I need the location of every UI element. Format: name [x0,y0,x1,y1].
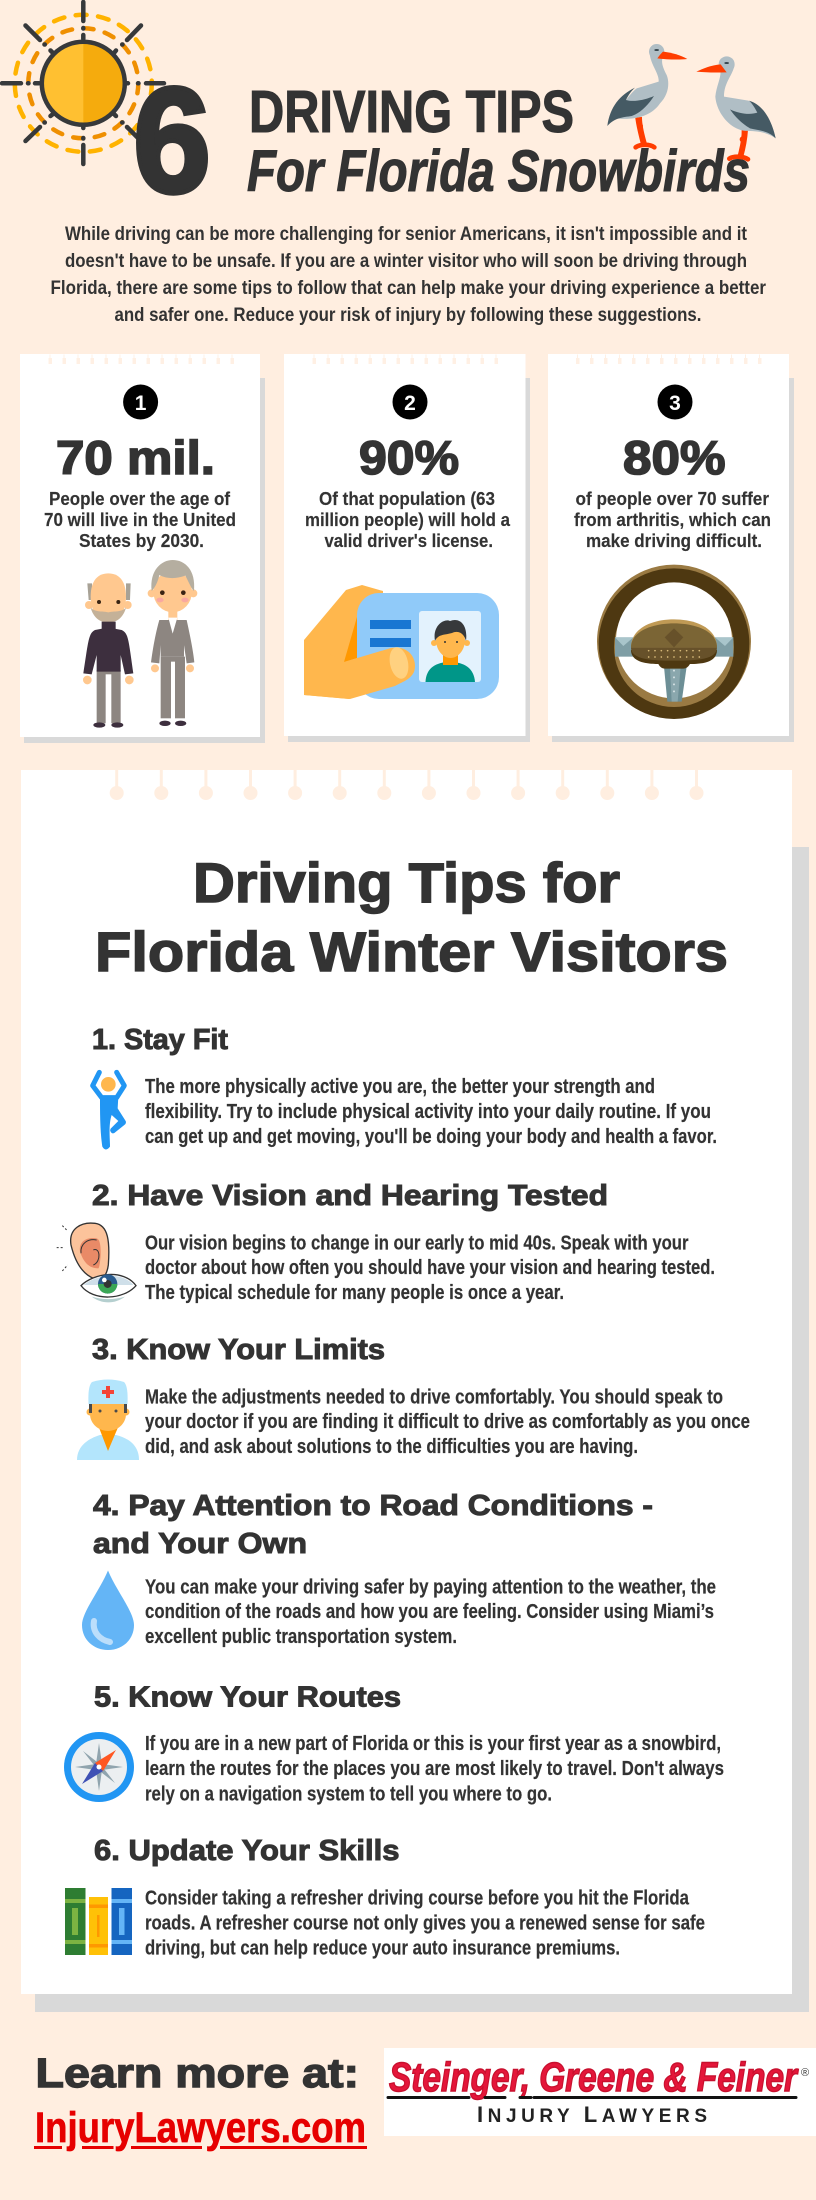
tip 2 text: Our vision begins to change in our early to mid 40s. Speak with your [145,1232,689,1254]
number badge 3 [658,384,692,420]
tip 1 heading: 1. Stay Fit [92,1024,228,1056]
tip 5 heading: 5. Know Your Routes [94,1682,401,1714]
tip 1: stay fit [92,1024,717,1149]
tip 4 heading: 4. Pay Attention to Road Conditions - [93,1490,653,1522]
icon: ear and eye [57,1223,136,1302]
footer call to action: Learn more at: [36,2050,359,2096]
tip 2 text [145,1232,715,1304]
tip 6 heading: 6. Update Your Skills [94,1835,400,1867]
logo: Steinger, Greene & Feiner [384,2048,816,2136]
number badge 1: 1 [135,392,147,415]
stat description 1 [44,488,236,551]
panel heading: Driving Tips for [193,851,620,914]
tip 5 text: learn the routes for the places you are most likely to travel. Don't always [145,1758,724,1780]
panel: stat card 1 [20,354,265,743]
title: DRIVING TIPS [249,79,574,145]
tip 6: update your skills [65,1835,705,1960]
logo: Steinger, Greene & Feiner: ® [801,2067,809,2079]
icon: water drop [82,1570,134,1650]
number badge 2 [392,384,428,420]
tip 4 text: condition of the roads and how you are feeling. Consider using Miami’s [145,1601,714,1623]
tip 4 heading [93,1490,653,1560]
tip 6 text: Consider taking a refresher driving course before you hit the Florida [145,1888,690,1910]
tip 1 text: can get up and get moving, you'll be doing your body and health a favor. [145,1126,717,1148]
tip 4 text [145,1576,716,1648]
number badge 1 [123,384,158,420]
stat description 1: States by 2030. [79,530,204,551]
stat description 3 [574,488,771,551]
big number 6: 6 [133,56,211,224]
stat: 70 mil.: 70 mil. [56,431,215,484]
icon: senior couple [83,560,197,728]
panel: driving tips [21,770,809,2012]
intro paragraph [50,223,766,326]
number badge 2: 2 [404,392,416,415]
icon: doctor [77,1380,139,1460]
tip 5 text [145,1733,724,1806]
tip 6 text: driving, but can help reduce your auto insurance premiums. [145,1938,620,1960]
tip 4 text: excellent public transportation system. [145,1626,457,1648]
stat description 2: Of that population (63 [319,488,495,509]
icon: sun [2,2,164,164]
tip 5 text: If you are in a new part of Florida or this is your first year as a snowbird, [145,1733,721,1755]
icon: hand holding driver's license [304,585,499,699]
stat: 80%: 80% [623,431,726,484]
tip 3 text [145,1386,750,1458]
stat description 3: of people over 70 suffer [576,488,769,509]
panel: stat card 3 [548,354,794,742]
stat description 3: make driving difficult. [586,530,762,551]
tip 3 text: Make the adjustments needed to drive comfortably. You should speak to [145,1386,723,1408]
tip 2 text: doctor about how often you should have your vision and hearing tested. [145,1257,715,1279]
icon: steering wheel [597,565,751,719]
icon: stretching figure [93,1072,126,1149]
tip 2: vision and hearing [57,1180,715,1304]
tip 2 text: The typical schedule for many people is once a year. [145,1282,564,1304]
stat description 1: People over the age of [49,488,231,509]
stat description 1: 70 will live in the United [44,509,236,530]
icon: compass [64,1732,134,1802]
icon: storks [607,44,776,159]
tip 3 heading: 3. Know Your Limits [92,1334,385,1366]
tip 4 text: You can make your driving safer by paying attention to the weather, the [145,1576,716,1598]
icon: books [65,1888,132,1955]
number badge 3: 3 [669,392,681,415]
panel heading [95,851,728,983]
tip 6 text [145,1888,705,1960]
tip 1 text [145,1076,717,1148]
intro paragraph: and safer one. Reduce your risk of injury by following these suggestions. [114,304,702,326]
link: InjuryLawyers.com: InjuryLawyers.com [35,2104,366,2152]
tip 4 heading: and Your Own [93,1528,307,1560]
footer call to action [34,2050,367,2152]
title [247,79,750,204]
tip 6 text: roads. A refresher course not only gives you a renewed sense for safe [145,1912,705,1934]
tip 4: road conditions [82,1490,716,1650]
tip 1 text: flexibility. Try to include physical activity into your daily routine. If you [145,1101,711,1123]
panel heading: Florida Winter Visitors [95,920,728,983]
tip 1 text: The more physically active you are, the better your strength and [145,1076,655,1098]
stat description 2 [305,488,511,551]
tip 3: know your limits [77,1334,750,1460]
tip 5 text: rely on a navigation system to tell you where to go. [145,1784,552,1806]
tip 2 heading: 2. Have Vision and Hearing Tested [92,1180,608,1212]
tip 3 text: did, and ask about solutions to the difficulties you are having. [145,1436,638,1458]
logo: Steinger, Greene & Feiner: INJURY LAWYERS [477,2102,707,2127]
tip 5: know your routes [64,1682,724,1806]
stat: 90%: 90% [359,431,459,484]
stat description 2: valid driver's license. [324,530,493,551]
panel: stat card 2 [284,354,530,742]
stat description 2: million people) will hold a [305,509,511,530]
stat description 3: from arthritis, which can [574,509,771,530]
